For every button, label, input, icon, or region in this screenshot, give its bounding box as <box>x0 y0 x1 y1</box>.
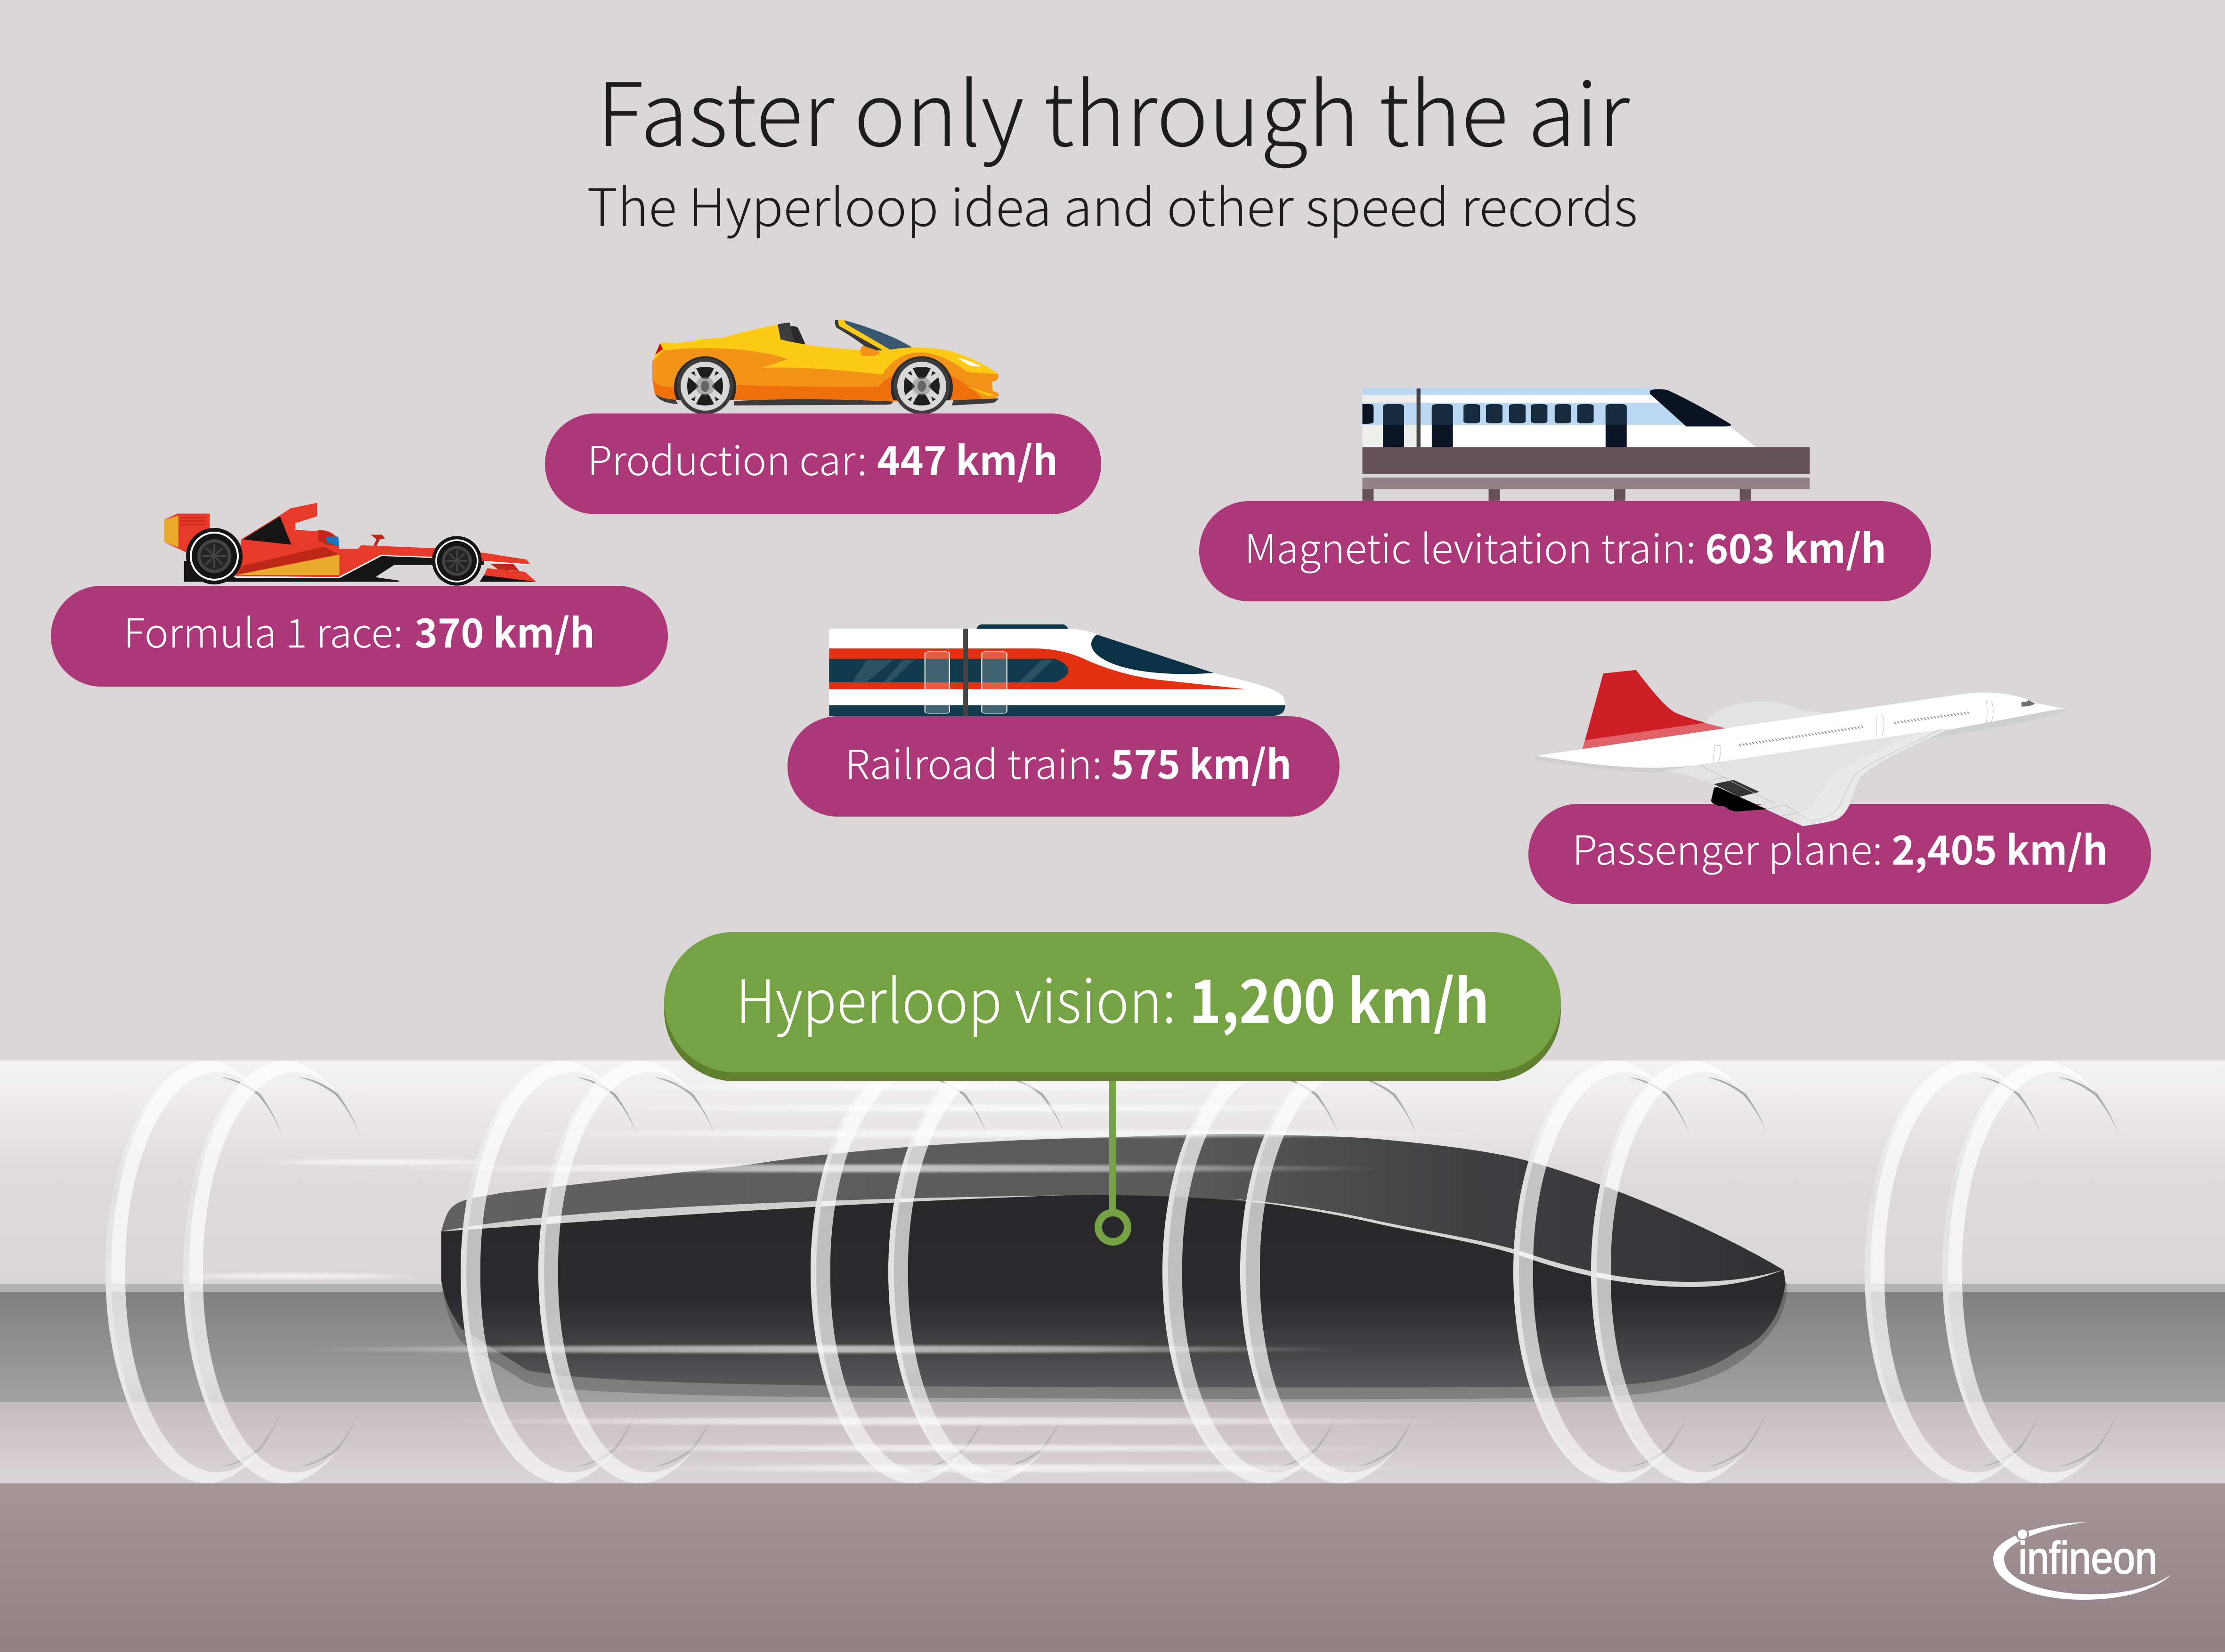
callout pill <box>664 932 1561 1072</box>
pod highlight left <box>441 1195 1067 1231</box>
title: Faster only through the air <box>597 44 1630 171</box>
plane wing overlapping pill <box>1714 804 1850 826</box>
logo: infineon <box>1993 1522 2171 1600</box>
pod highlight right <box>1229 1199 1784 1287</box>
subtitle: The Hyperloop idea and other speed records <box>587 166 1638 241</box>
pill: production car: 447 km/h <box>877 429 1058 487</box>
icon: railroad train <box>829 624 1285 716</box>
icon: production car <box>652 320 999 414</box>
callout connector line <box>1109 1078 1116 1213</box>
icon: car wheels <box>674 356 953 414</box>
icon: formula 1 wheels <box>186 528 482 586</box>
pill: railroad train: 575 km/h <box>1111 733 1291 791</box>
pill: railroad train <box>788 716 1340 817</box>
icon: passenger plane <box>1535 670 2068 826</box>
hyperloop pod <box>441 1134 1787 1399</box>
pod upper shell <box>441 1134 1784 1300</box>
pill: magnetic levitation train: Magnetic levitation train: <box>1244 517 1696 575</box>
callout: hyperloop vision: 1,200 km/h <box>1189 954 1489 1040</box>
pill: passenger plane: 2,405 km/h <box>1892 818 2108 876</box>
icon: maglev train <box>1363 388 1810 501</box>
pill: passenger plane: Passenger plane: <box>1572 818 1883 876</box>
pill: magnetic levitation train <box>1199 501 1931 601</box>
speed streaks <box>162 1083 1507 1472</box>
logo: infineon: infineon <box>2018 1533 2157 1583</box>
pill: railroad train: Railroad train: <box>845 733 1102 791</box>
pod body <box>441 1195 1786 1387</box>
pill: formula 1 race <box>51 586 668 687</box>
callout pill shadow <box>664 940 1561 1081</box>
callout: hyperloop vision <box>664 932 1561 1242</box>
pill: formula 1 race: Formula 1 race: <box>123 601 403 659</box>
pill: production car <box>545 413 1101 514</box>
pill: production car: Production car: <box>587 429 867 487</box>
tube rings <box>106 1061 2119 1483</box>
pill: formula 1 race: 370 km/h <box>414 601 595 659</box>
pill: passenger plane <box>1528 804 2151 904</box>
callout marker ring <box>1098 1213 1128 1242</box>
ground <box>0 1483 2225 1652</box>
callout: hyperloop vision: Hyperloop vision: <box>736 954 1176 1040</box>
tube background <box>0 1061 2225 1483</box>
icon: formula 1 car <box>164 503 536 582</box>
pill: magnetic levitation train: 603 km/h <box>1705 517 1886 575</box>
pod shadow <box>441 1271 1787 1399</box>
